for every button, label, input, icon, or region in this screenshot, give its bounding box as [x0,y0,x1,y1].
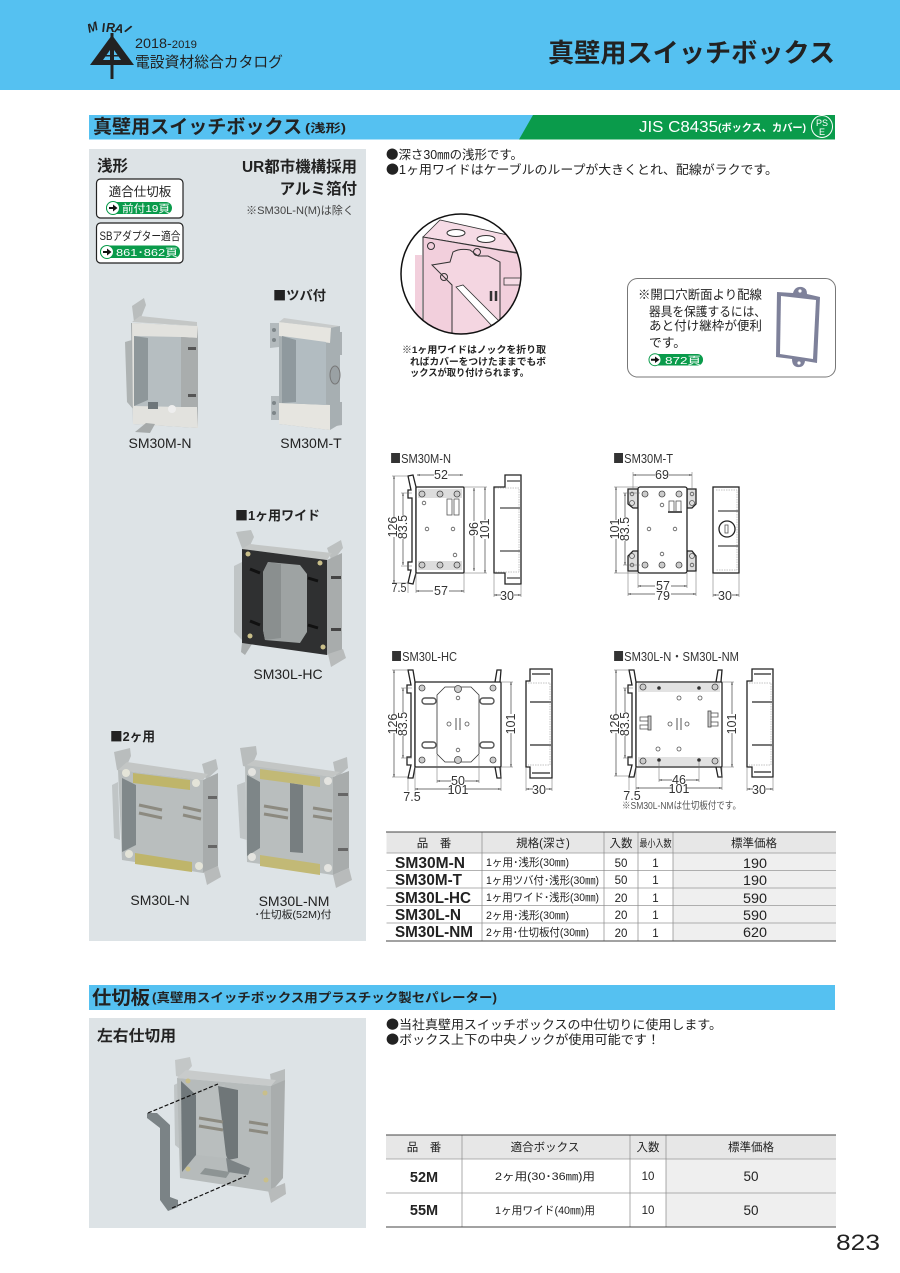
label: SM30L-N: SM30L-N [130,892,190,908]
heading: UR spec: UR都市機構採用 [242,157,357,176]
heading: flange type: ■ツバ付 [273,285,326,304]
photo: SM30L-NM [237,746,352,888]
drawing: SM30M-T: 69 [655,468,669,482]
callout: add-on frame: 872頁 [665,355,701,367]
catalog year: 2018-2019 [135,35,197,51]
drawing: SM30M-N: 83.5 [396,515,410,539]
drawing: SM30L-N and SM30L-NM [608,646,773,812]
drawing: SM30M-N: 101 [478,519,492,539]
row: 55M: 50 [743,1203,759,1218]
photo: SM30L-HC [234,530,346,667]
note: knockout: ればカバーをつけたままでもボ [410,356,547,368]
label: SM30L-NM: SM30L-NM [259,893,329,909]
quantities: 1 [652,875,659,887]
table header row: 入数 [610,837,633,850]
model numbers: SM30L-N [395,907,461,924]
row: 52M: 2ヶ用(30･36㎜)用 [495,1171,595,1183]
drawing: SM30L-HC: 7.5 [403,790,421,804]
photo: SM30M-N [125,298,198,433]
callout: add-on frame: ※開口穴断面より配線 [638,287,762,302]
heading: 左右仕切用: 左右仕切用 [97,1027,176,1045]
table header row [407,1140,774,1154]
note: knockout: ックスが取り付けられます。 [410,367,529,379]
drawing: SM30M-T: 79 [656,589,670,603]
drawing: SM30M-N: ■SM30M-N [390,448,451,467]
drawing: SM30M-N [386,448,521,603]
row: 55M: 55M [410,1203,438,1219]
PSE mark: E [819,127,825,137]
specifications: 1ヶ用ワイド･浅形(30㎜) [486,891,599,904]
callout: add-on frame [628,278,836,377]
quantities: 1 [652,893,659,905]
row: 52M: 10 [642,1171,654,1183]
separator bullets: ●ボックス上下の中央ノックが使用可能です！ [386,1029,660,1048]
heading: wide type: ■1ヶ用ワイド [235,505,320,524]
drawing: SM30M-N: 52 [434,468,448,482]
callout: add-on frame: です。 [649,336,686,350]
drawing: SM30M-N: 7.5 [392,581,407,595]
drawing: SM30M-N: 30 [500,589,514,603]
heading: foil: アルミ箔付 [280,179,357,198]
callout: SB adapter reference [96,223,183,263]
drawing: SM30L-N and SM30L-NM: 101 [725,714,739,734]
panel: separator photo [89,1018,366,1228]
callout: add-on frame: あと付け継枠が便利 [649,318,762,333]
feature bullets: ●1ヶ用ワイドはケーブルのループが大きくとれ、配線がラクです。 [386,159,778,178]
callout: partition reference: 適合仕切板 [109,185,172,199]
row: 55M: 1ヶ用ワイド(40㎜)用 [495,1205,595,1217]
prices [743,856,767,940]
table header row: 適合ボックス [511,1140,579,1154]
specifications [486,856,599,939]
quantities: 1 [652,928,659,940]
quantities: 1 [652,910,659,922]
inset: knockout detail circle [401,214,530,340]
drawing: SM30L-HC: 101 [504,714,518,734]
photo: box with separator [147,1057,286,1211]
drawing: SM30M-T: ■SM30M-T [613,448,673,467]
drawing: SM30L-HC: 83.5 [396,712,410,736]
drawing: SM30M-T [608,448,739,603]
model numbers: SM30L-HC [395,890,471,907]
table: box models [386,832,836,941]
table header row: 品 番 [417,837,452,850]
table header row: 標準価格 [728,1140,774,1154]
label: SM30L-HC: SM30L-HC [253,666,323,682]
section heading: 仕切板 [92,987,150,1009]
prices: 190 [743,856,767,871]
drawing: SM30M-N: 57 [434,584,448,598]
model numbers [395,855,473,941]
feature bullets [386,144,778,178]
prices: 190 [743,873,767,888]
callout: partition reference: 前付19頁 [122,202,170,215]
section heading suffix: (浅形) [305,121,346,135]
prices: 620 [743,925,767,940]
row: 52M: 52M [410,1170,438,1186]
callout: SB adapter reference: SBアダプター適合 [100,229,181,243]
table header row: 規格(深さ) [516,836,570,850]
table: separator models [386,1135,836,1227]
table header row: 標準価格 [731,836,777,850]
table header row: 最小入数 [640,837,672,850]
drawing: SM30M-T: 83.5 [618,517,632,541]
PSE mark: PS [816,118,828,128]
drawing: SM30L-HC: 101 [448,783,468,797]
catalog name: 電設資材総合カタログ [135,54,283,71]
logo: MIRAI: MIRAI [85,19,134,36]
quantities: 20 [615,910,627,922]
page header band [0,0,900,90]
drawing: SM30M-T: 57 [656,579,670,593]
drawing: SM30L-HC [386,646,552,804]
quantities: 20 [615,893,627,905]
prices: 590 [743,908,767,923]
specifications: 2ヶ用･浅形(30㎜) [486,909,569,922]
callout: add-on frame: 器具を保護するには、 [649,304,766,319]
note: knockout [402,344,547,379]
row: 52M: 50 [743,1169,759,1184]
quantities: 20 [615,928,627,940]
section heading: 真壁用スイッチボックス [93,116,302,138]
specifications: 1ヶ用･浅形(30㎜) [486,856,569,869]
prices: 590 [743,891,767,906]
drawing: SM30L-N and SM30L-NM: 83.5 [618,712,632,736]
drawing: SM30M-N: 126 [386,517,400,537]
JIS standard: JIS C8435 [639,119,718,136]
quantities: 1 [652,858,659,870]
page number: 823 [836,1230,880,1255]
quantities: 50 [615,858,627,870]
drawing: SM30L-HC: 126 [386,714,400,734]
note: exclusion: ※SM30L-N(M)は除く [246,203,354,217]
heading: two-gang: ■2ヶ用 [110,726,155,745]
model numbers: SM30M-N [395,855,465,872]
specifications: 1ヶ用ツバ付･浅形(30㎜) [486,874,599,887]
table header row: 入数 [636,1141,660,1154]
photo: SM30M-T [270,318,342,430]
quantities [615,858,659,940]
model numbers: SM30L-NM [395,924,473,941]
label: SM30M-T: SM30M-T [280,435,342,451]
drawing: SM30M-T: 101 [608,519,622,539]
JIS note: (ボックス、カバー) [718,122,806,134]
panel: product photos [89,149,366,941]
drawing: SM30L-N and SM30L-NM: 30 [752,783,766,797]
drawing: SM30L-N and SM30L-NM: ■SM30L-N・SM30L-NM [613,646,739,665]
callout: partition reference [96,179,183,218]
section subheading: (真壁用スイッチボックス用プラスチック製セパレーター) [152,990,497,1005]
heading: 浅形: 浅形 [97,156,129,175]
drawing: SM30L-N and SM30L-NM: 46 [672,773,686,787]
drawing: SM30M-T: 30 [718,589,732,603]
table header row: 品 番 [407,1141,442,1154]
note: knockout: ※1ヶ用ワイドはノックを折り取 [402,344,547,356]
page title: 真壁用スイッチボックス [548,38,835,68]
drawing: SM30L-HC: ■SM30L-HC [391,646,457,665]
row: 55M [410,1203,759,1219]
drawing: SM30M-N: 96 [467,522,481,536]
section bar: 真壁用スイッチボックス [89,115,835,140]
logo: MIRAI [85,19,134,79]
icon: add-on frame [776,287,820,367]
model numbers: SM30M-T [395,872,463,889]
feature bullets: ●深さ30㎜の浅形です。 [386,144,523,163]
PSE mark [812,116,832,138]
quantities: 50 [615,875,627,887]
row: 52M [410,1169,759,1186]
section bar: 仕切板 [89,985,835,1010]
table header row [417,836,777,850]
photo: SM30L-N [112,748,221,885]
callout: SB adapter reference: 861･862頁 [116,247,178,259]
specifications: 2ヶ用･仕切板付(30㎜) [486,925,589,939]
drawing: SM30L-N and SM30L-NM: 126 [608,714,622,734]
separator bullets: ●当社真壁用スイッチボックスの中仕切りに使用します。 [386,1014,722,1033]
drawing: SM30L-HC: 50 [451,774,465,788]
row: 55M: 10 [642,1205,654,1217]
drawing: SM30L-N and SM30L-NM: 7.5 [623,789,641,803]
label: partition included: ･仕切板(52M)付 [254,908,332,921]
drawing: SM30L-N and SM30L-NM: 101 [669,782,689,796]
separator bullets [386,1014,722,1048]
drawing: SM30L-HC: 30 [532,783,546,797]
drawing: SM30L-N and SM30L-NM: ※SM30L-NMは仕切板付です。 [622,799,741,812]
label: SM30M-N: SM30M-N [128,435,192,451]
